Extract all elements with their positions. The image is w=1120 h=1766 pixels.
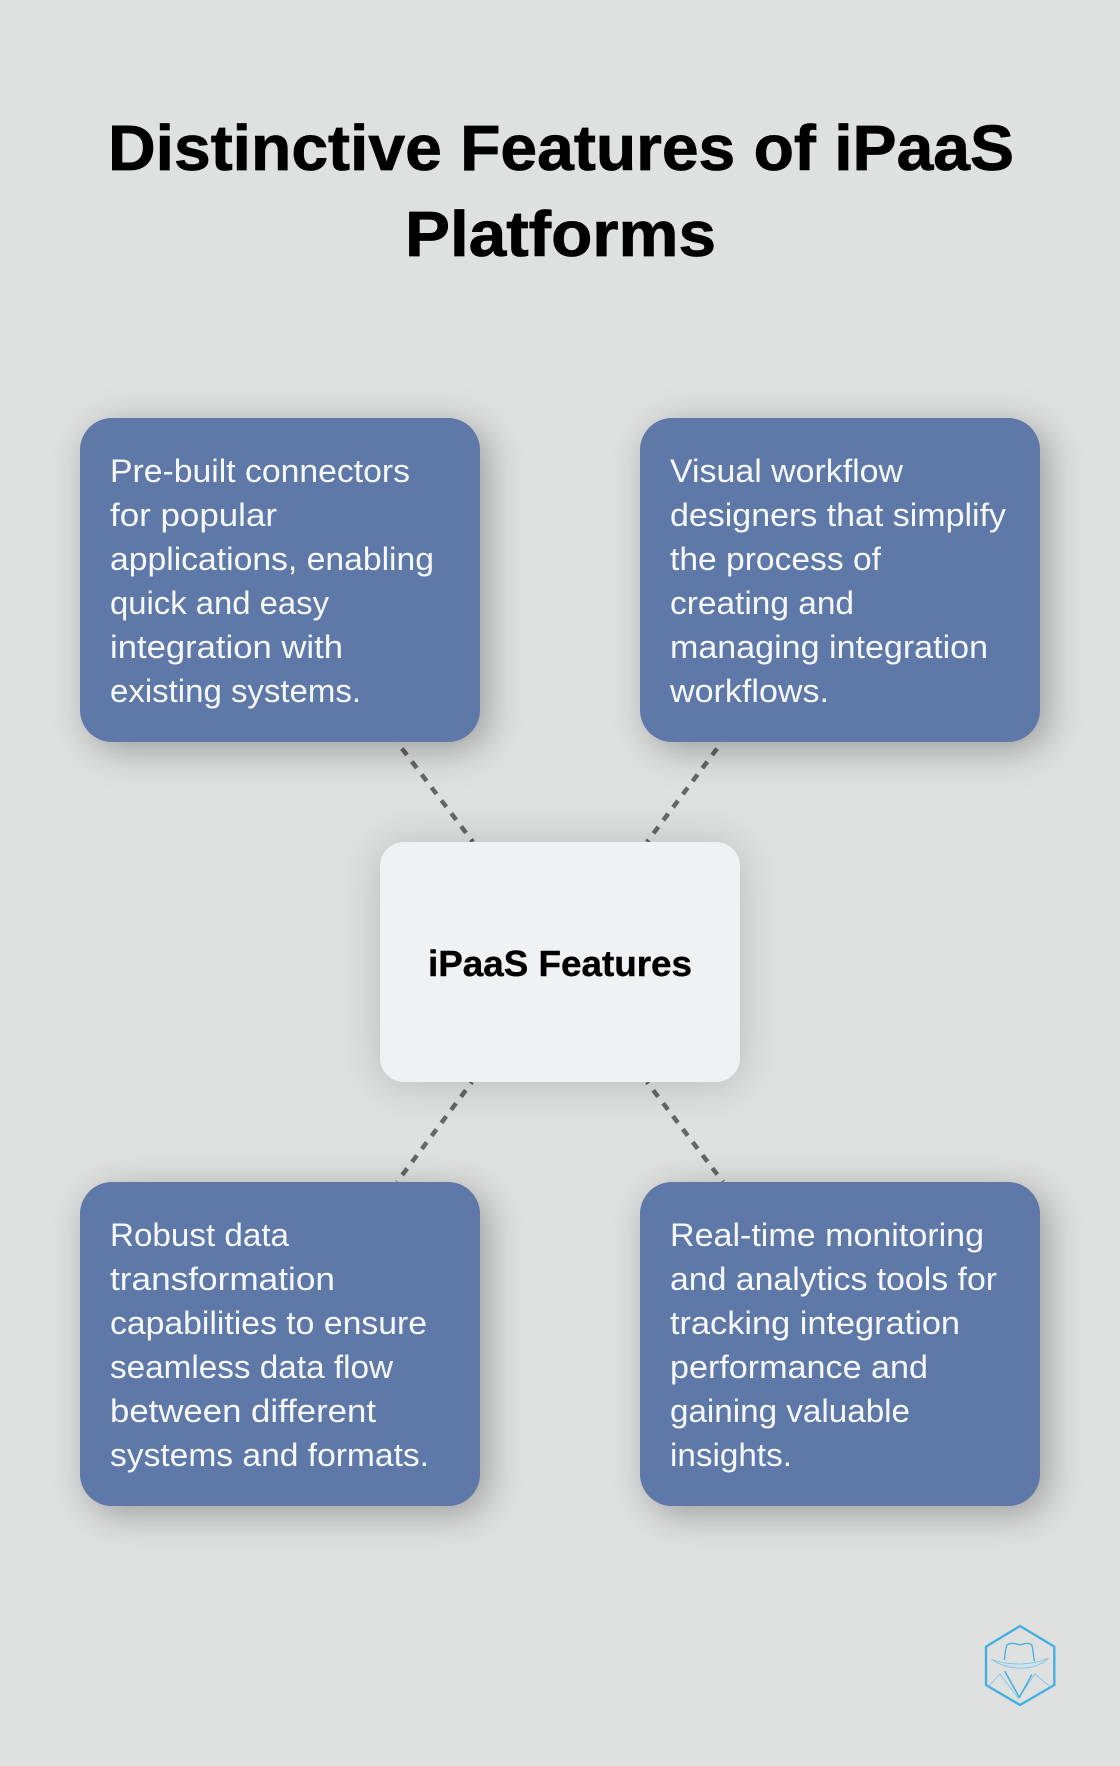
text: pre-built connectors description: integration with bbox=[110, 629, 343, 665]
text: visual workflow description: creating and bbox=[670, 585, 854, 621]
text: real-time monitoring description: Real-time monitoring bbox=[670, 1217, 984, 1253]
panel: visual workflow designers bbox=[640, 418, 1040, 742]
text: data transformation description: Robust data bbox=[110, 1217, 289, 1253]
text: pre-built connectors description: applications, enabling bbox=[110, 541, 434, 577]
title: Platforms bbox=[405, 198, 716, 270]
text: data transformation description: capabilities to ensure bbox=[110, 1305, 427, 1341]
text: pre-built connectors description: for popular bbox=[110, 497, 277, 533]
text: pre-built connectors description: existing systems. bbox=[110, 673, 361, 709]
connector: centre to bottom left card bbox=[397, 1082, 472, 1182]
panel: centre node bbox=[380, 842, 740, 1082]
centre label: iPaaS Features bbox=[428, 943, 692, 984]
text: data transformation description: transformation bbox=[110, 1261, 335, 1297]
text: visual workflow description: designers that simplify bbox=[670, 497, 1006, 533]
text: data transformation description: systems and formats. bbox=[110, 1437, 429, 1473]
text: real-time monitoring description bbox=[670, 1217, 997, 1473]
title: Distinctive Features of iPaaS bbox=[108, 112, 1014, 184]
text: real-time monitoring description: gaining valuable bbox=[670, 1393, 910, 1429]
text: pre-built connectors description bbox=[110, 453, 434, 709]
icon: hexagon spy logo bbox=[986, 1626, 1054, 1705]
text: real-time monitoring description: and analytics tools for bbox=[670, 1261, 997, 1297]
text: data transformation description: between different bbox=[110, 1393, 376, 1429]
text: visual workflow description bbox=[669, 453, 1006, 709]
text: real-time monitoring description: insights. bbox=[670, 1437, 792, 1473]
title bbox=[108, 112, 1014, 270]
text: data transformation description: seamless data flow bbox=[110, 1349, 394, 1385]
connector: top left card to centre bbox=[397, 742, 473, 842]
text: pre-built connectors description: Pre-built connectors bbox=[110, 453, 410, 489]
text: visual workflow description: managing integration bbox=[670, 629, 988, 665]
text: data transformation description bbox=[110, 1217, 429, 1473]
panel: data transformation bbox=[80, 1182, 480, 1506]
text: real-time monitoring description: tracking integration bbox=[670, 1305, 960, 1341]
connector: top right card to centre bbox=[647, 742, 722, 842]
text: visual workflow description: Visual workflow bbox=[670, 453, 904, 489]
panel: pre-built connectors bbox=[80, 418, 480, 742]
text: visual workflow description: workflows. bbox=[669, 673, 829, 709]
connector: centre to bottom right card bbox=[647, 1082, 723, 1182]
text: visual workflow description: the process of bbox=[670, 541, 881, 577]
text: real-time monitoring description: performance and bbox=[670, 1349, 928, 1385]
panel: real-time monitoring bbox=[640, 1182, 1040, 1506]
text: pre-built connectors description: quick and easy bbox=[110, 585, 329, 621]
